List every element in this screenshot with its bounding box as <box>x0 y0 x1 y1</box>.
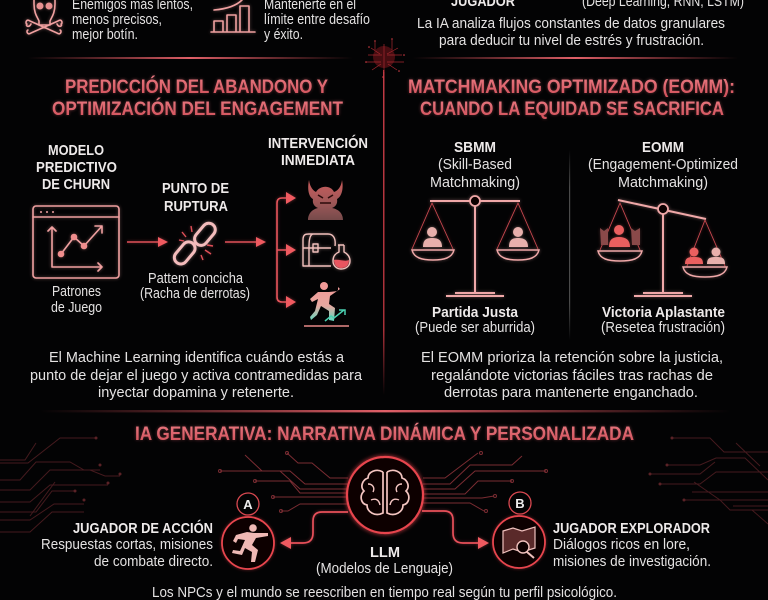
heading: predicción del abandono: OPTIMIZACIÓN DEL ENGAGEMENT <box>52 98 343 120</box>
text: machine learning: inyectar dopamina y retenerte. <box>98 384 294 401</box>
branch arrows <box>277 192 296 308</box>
top-left text: enemigos: mejor botín. <box>72 26 138 43</box>
heading: sbmm: SBMM <box>454 139 496 156</box>
arrow: ruptura a intervención <box>225 237 266 247</box>
heading: intervención inmediata: INTERVENCIÓN <box>268 134 368 152</box>
text: jugador explorador <box>553 520 711 570</box>
label: victoria aplastante: Victoria Aplastante <box>602 304 725 321</box>
top icon: difficulty curve bars <box>211 0 255 32</box>
text: análisis de datos <box>417 15 725 49</box>
heading: matchmaking optimizado: CUANDO LA EQUIDAD SE SACRIFICA <box>420 99 724 120</box>
heading: matchmaking optimizado <box>408 77 735 120</box>
label: LLM <box>316 544 453 577</box>
icon: balanced scale <box>412 196 539 296</box>
heading: eomm: (Engagement-Optimized <box>588 156 738 173</box>
top text: mantenerte: y éxito. <box>264 26 303 43</box>
icon: action player <box>222 517 274 569</box>
badge: B: B <box>515 496 525 511</box>
top-left text: enemigos: menos precisos, <box>72 11 162 28</box>
badge: B <box>509 492 531 514</box>
icon: chest and potion <box>303 234 350 269</box>
text: machine learning <box>30 349 363 401</box>
text: machine learning: punto de dejar el juego y activa contramedidas para <box>30 367 363 384</box>
icon: tilted scale <box>598 200 727 296</box>
label: LLM: LLM <box>370 544 400 561</box>
text: eomm explicación: regalándote victorias fáciles tras rachas de <box>431 367 713 384</box>
heading: eomm: EOMM <box>642 139 684 156</box>
icon: runner and growth arrow <box>304 282 349 326</box>
arrow: LLM a jugador de acción <box>280 512 348 549</box>
label: pattern concicha: Pattem concicha <box>148 270 244 287</box>
label: partida justa: (Puede ser aburrida) <box>415 319 535 336</box>
text: jugador explorador: misiones de investigación. <box>553 553 711 570</box>
heading: eomm <box>588 139 738 191</box>
text: jugador de acción <box>41 519 213 570</box>
heading: modelo predictivo de churn: DE CHURN <box>42 176 110 193</box>
heading: eomm: Matchmaking) <box>618 174 708 191</box>
arrow: LLM a jugador explorador <box>422 511 489 549</box>
text: jugador explorador: Diálogos ricos en lore, <box>553 536 690 553</box>
label: patrones de juego <box>51 283 102 316</box>
heading: sbmm: (Skill-Based <box>438 156 512 173</box>
badge: A <box>237 493 259 515</box>
label: patrones de juego: Patrones <box>52 283 101 300</box>
icon: devil <box>308 180 343 220</box>
heading: predicción del abandono <box>52 76 343 120</box>
label: pattern concicha: (Racha de derrotas) <box>140 285 250 302</box>
icon: map with magnifier <box>493 516 545 568</box>
central circuit brain ornament <box>365 38 405 78</box>
top text: mantenerte <box>264 0 370 43</box>
heading: punto de ruptura <box>162 180 229 215</box>
top-left icon: skull and crossbones <box>26 0 62 34</box>
badge: A: A <box>243 497 253 512</box>
heading: punto de ruptura: PUNTO DE <box>162 180 229 197</box>
text: análisis de datos: La IA analiza flujos constantes de datos granulares <box>417 15 725 32</box>
heading: intervención inmediata: INMEDIATA <box>281 152 355 169</box>
brain circuit traces <box>218 452 548 512</box>
text: eomm explicación: El EOMM prioriza la retención sobre la justicia, <box>421 349 723 366</box>
heading: modelo predictivo de churn: PREDICTIVO <box>36 159 117 176</box>
heading: modelo predictivo de churn: MODELO <box>48 142 104 159</box>
label: patrones de juego: de Juego <box>51 299 102 316</box>
heading: matchmaking optimizado: MATCHMAKING OPTIMIZADO (EOMM): <box>408 77 735 98</box>
top text: mantenerte: límite entre desafío <box>264 11 370 28</box>
icon: browser window with chart <box>33 206 119 278</box>
text: jugador de acción: Respuestas cortas, misiones <box>41 536 213 553</box>
heading: sbmm: Matchmaking) <box>430 174 520 191</box>
heading: sbmm <box>430 139 520 191</box>
label: LLM: (Modelos de Lenguaje) <box>316 560 453 577</box>
heading: predicción del abandono: PREDICCIÓN DEL ABANDONO Y <box>65 76 328 98</box>
heading: intervención inmediata <box>268 134 368 169</box>
text: análisis de datos: para deducir tu nivel de estrés y frustración. <box>439 32 704 49</box>
background circuits <box>0 436 768 532</box>
icon: broken chain link <box>172 221 218 267</box>
text: jugador de acción: JUGADOR DE ACCIÓN <box>73 519 213 537</box>
text: eomm explicación: derrotas para mantenerte enganchado. <box>444 384 698 401</box>
label: victoria aplastante: (Resetea frustración) <box>601 319 725 336</box>
label: victoria aplastante <box>601 304 725 336</box>
label: partida justa <box>415 304 535 336</box>
text: eomm explicación <box>421 349 723 401</box>
text: machine learning: El Machine Learning identifica cuándo estás a <box>49 349 345 366</box>
heading: modelo predictivo de churn <box>36 142 117 193</box>
heading: punto de ruptura: RUPTURA <box>164 198 228 215</box>
label: pattern concicha <box>140 270 250 302</box>
arrow: modelo a ruptura <box>127 237 168 247</box>
top-left text: enemigos <box>72 0 193 43</box>
text: jugador de acción: de combate directo. <box>94 553 213 570</box>
label: partida justa: Partida Justa <box>432 304 519 321</box>
icon: brain LLM <box>347 457 423 533</box>
heading: ia generativa: IA GENERATIVA: NARRATIVA DINÁMICA Y PERSONALIZADA <box>135 423 634 445</box>
text: jugador explorador: JUGADOR EXPLORADOR <box>553 520 710 537</box>
